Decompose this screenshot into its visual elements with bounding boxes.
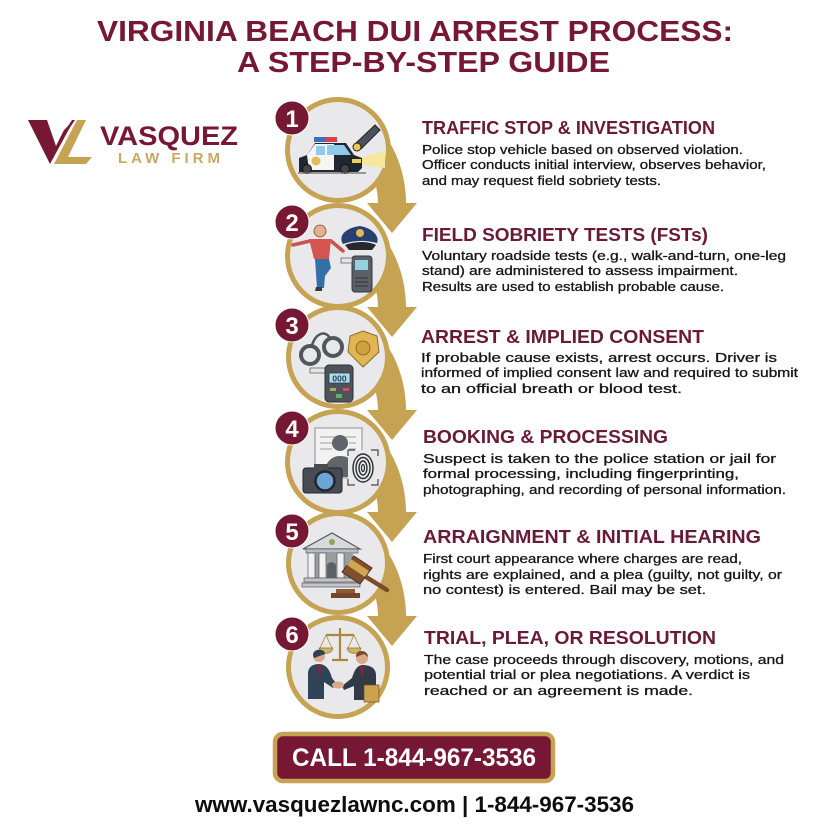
logo: Vasquez Law Firm: [28, 120, 238, 167]
step 1 text: TRAFFIC STOP & INVESTIGATION: [422, 117, 715, 138]
title: VIRGINIA BEACH DUI ARREST PROCESS:: [97, 16, 733, 48]
badge: 2: 2: [285, 210, 299, 237]
step 4 text: BOOKING & PROCESSING: [423, 426, 668, 447]
arrow: step 3 to 4: [366, 347, 417, 440]
step 6 text: TRIAL, PLEA, OR RESOLUTION: [424, 627, 716, 648]
step 4 text: photographing, and recording of personal information.: [423, 482, 786, 497]
step 5 text: ARRAIGNMENT & INITIAL HEARING: [423, 526, 761, 547]
icon: record, camera, fingerprint: [303, 428, 378, 493]
title: A STEP-BY-STEP GUIDE: [237, 47, 610, 79]
badge: 6: 6: [285, 622, 299, 649]
step 3 text: informed of implied consent law and required to submit: [421, 365, 798, 380]
badge: 6: [275, 617, 309, 651]
step 1 text: and may request field sobriety tests.: [422, 173, 661, 188]
arrow: step 5 to 6: [366, 553, 417, 646]
step 3 text: to an official breath or blood test.: [421, 381, 682, 396]
step 1 text: Officer conducts initial interview, observes behavior,: [422, 157, 766, 172]
badge: 4: 4: [285, 416, 299, 443]
step 5 text: [423, 526, 783, 597]
icon: scales and handshake: [308, 628, 379, 702]
step 4 text: formal processing, including fingerprinting,: [423, 466, 739, 481]
icon: handcuffs, badge, breath device: 000: [332, 374, 347, 384]
step 1 text: [422, 117, 766, 188]
arrow: step 4 to 5: [366, 449, 417, 542]
step 4 text: Suspect is taken to the police station or jail for: [423, 451, 777, 466]
step 2 text: FIELD SOBRIETY TESTS (FSTs): [422, 224, 708, 245]
badge: 3: [275, 308, 309, 342]
step 2 text: Results are used to establish probable cause.: [422, 279, 724, 294]
step 5 text: rights are explained, and a plea (guilty, not guilty, or: [423, 567, 783, 582]
step 5 text: no contest) is entered. Bail may be set.: [423, 582, 706, 597]
badge: 2: [275, 205, 309, 239]
logo: Vasquez Law Firm: VASQUEZ: [100, 121, 238, 151]
icon: courthouse and gavel: [302, 533, 387, 598]
arrow: step 1 to 2: [366, 140, 417, 233]
call button: [275, 734, 553, 781]
step 3 text: ARREST & IMPLIED CONSENT: [421, 326, 705, 347]
step 6 circle: [288, 618, 388, 716]
badge: 5: 5: [285, 519, 299, 546]
icon: field sobriety person, cap, breathalyzer: [293, 225, 378, 292]
step 4 text: [423, 426, 786, 497]
step 2 text: Voluntary roadside tests (e.g., walk-and-turn, one-leg: [422, 248, 786, 263]
badge: 1: 1: [285, 106, 299, 133]
icon: police car with flashlight: [298, 125, 385, 174]
step 6 text: [424, 627, 784, 698]
badge: 1: [275, 101, 309, 135]
step 2 circle: [288, 206, 388, 306]
logo: Vasquez Law Firm: LAW FIRM: [118, 150, 220, 167]
badge: 4: [275, 411, 309, 445]
step 3 text: If probable cause exists, arrest occurs. Driver is: [421, 350, 778, 365]
step 5 circle: [288, 514, 388, 612]
step 2 text: stand) are administered to assess impairment.: [422, 263, 738, 278]
step 5 text: First court appearance where charges are read,: [423, 551, 742, 566]
title: [97, 16, 733, 79]
arrow: step 2 to 3: [366, 244, 417, 337]
step 1 circle: [288, 100, 388, 200]
step 1 text: Police stop vehicle based on observed violation.: [422, 142, 743, 157]
step 4 circle: [288, 412, 388, 512]
badge: 5: [275, 514, 309, 548]
step 6 text: The case proceeds through discovery, motions, and: [424, 652, 784, 667]
badge: 3: 3: [285, 313, 299, 340]
step 6 text: reached or an agreement is made.: [424, 683, 693, 698]
call button: CALL 1-844-967-3536: [292, 744, 536, 772]
step 6 text: potential trial or plea negotiations. A verdict is: [424, 667, 750, 682]
step 3 circle: [288, 308, 388, 406]
step 3 text: [421, 326, 798, 396]
step 2 text: [422, 224, 786, 294]
footer contact line: www.vasquezlawnc.com | 1-844-967-3536: [194, 792, 634, 817]
